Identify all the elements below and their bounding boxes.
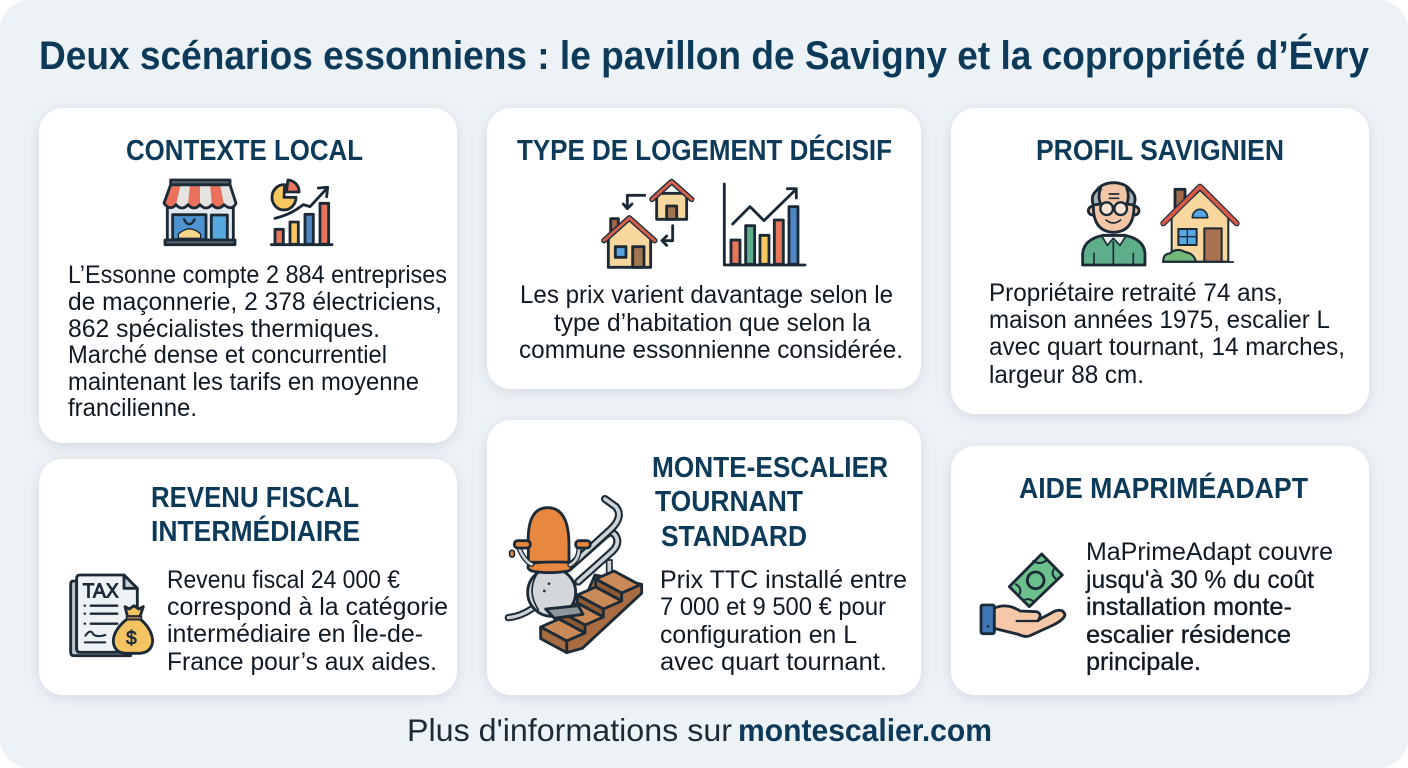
text: monte-escalier: avec quart tournant. (660, 648, 887, 676)
text: aide maprimeadapt: MaPrimeAdapt couvre (1086, 538, 1333, 566)
text: contexte local: francilienne. (68, 394, 197, 422)
footer: montescalier.com (738, 712, 992, 748)
text: monte-escalier: 7 000 et 9 500 € pour (660, 593, 886, 621)
heading: monte-escalier: TOURNANT (655, 486, 804, 518)
heading: profil savignien: PROFIL SAVIGNIEN (1036, 135, 1284, 167)
lift body (528, 568, 583, 618)
icon: tax document and money bag (71, 575, 153, 656)
heading: monte-escalier: MONTE-ESCALIER (652, 452, 888, 484)
text: contexte local: de maçonnerie, 2 378 électriciens, (68, 288, 442, 316)
text: revenu fiscal: France pour’s aux aides. (167, 648, 437, 676)
text: contexte local: maintenant les tarifs en moyenne (68, 368, 419, 396)
heading: revenu fiscal: REVENU FISCAL (151, 482, 359, 514)
text: contexte local: Marché dense et concurrentiel (68, 341, 387, 369)
text: revenu fiscal: intermédiaire en Île-de- (167, 619, 423, 648)
text: type de logement: type d’habitation que selon la (554, 309, 871, 337)
text: aide maprimeadapt: installation monte- (1086, 593, 1292, 621)
panel: revenu fiscal (39, 459, 457, 695)
text: contexte local: L’Essonne compte 2 884 entreprises (68, 261, 447, 289)
icon: tax document and money bag: TAX (83, 580, 119, 603)
icon: house (1163, 187, 1237, 262)
text: revenu fiscal: Revenu fiscal 24 000 € (167, 566, 400, 594)
heading: aide maprimeadapt: AIDE MAPRIMÉADAPT (1019, 473, 1309, 505)
text: contexte local: 862 spécialistes thermiques. (68, 315, 380, 343)
icon: shop (164, 180, 236, 245)
heading: revenu fiscal: INTERMÉDIAIRE (151, 516, 360, 548)
heading: revenu fiscal (151, 482, 360, 548)
heading: type de logement: TYPE DE LOGEMENT DÉCISIF (517, 135, 892, 167)
chair (510, 508, 590, 573)
panel: monte-escalier (487, 420, 921, 695)
rails (508, 499, 619, 618)
panel: profil savignien (951, 108, 1369, 414)
text: monte-escalier: Prix TTC installé entre (660, 566, 907, 594)
text: revenu fiscal: correspond à la catégorie (167, 593, 448, 621)
text: aide maprimeadapt: escalier résidence (1086, 621, 1291, 649)
panel: contexte local (39, 108, 457, 443)
icon: tax document and money bag: $ (126, 628, 137, 649)
text: profil savignien (989, 279, 1345, 389)
text: monte-escalier (660, 566, 907, 676)
text: type de logement: Les prix varient davantage selon le (520, 281, 893, 309)
text: aide maprimeadapt: principale. (1086, 648, 1201, 676)
text: aide maprimeadapt: jusqu'à 30 % du coût (1085, 566, 1314, 594)
text: monte-escalier: configuration en L (660, 621, 857, 649)
icon: elderly man (1083, 183, 1145, 265)
text: profil savignien: avec quart tournant, 14 marches, (989, 333, 1345, 361)
icon: growth chart (271, 180, 332, 245)
icon: hand with banknote (981, 554, 1065, 636)
footer: Plus d'informations sur (407, 712, 732, 748)
text: profil savignien: Propriétaire retraité 74 ans, (989, 279, 1283, 307)
heading: contexte local: CONTEXTE LOCAL (126, 135, 363, 167)
text: contexte local (68, 261, 447, 422)
text: profil savignien: maison années 1975, escalier L (989, 306, 1330, 334)
footer (407, 712, 992, 748)
panel: type de logement (487, 108, 921, 389)
text: profil savignien: largeur 88 cm. (989, 361, 1144, 389)
text: type de logement: commune essonnienne considérée. (519, 336, 903, 364)
text: type de logement (519, 281, 903, 364)
icon: stairlift (508, 499, 642, 653)
icon: bar chart (724, 184, 805, 265)
heading: monte-escalier (652, 452, 888, 553)
text: revenu fiscal (167, 566, 448, 676)
heading: monte-escalier: STANDARD (661, 521, 807, 553)
icon: houses exchange (604, 182, 692, 267)
panel: aide maprimeadapt (951, 446, 1369, 695)
staircase (541, 571, 642, 653)
text: aide maprimeadapt (1085, 538, 1333, 676)
